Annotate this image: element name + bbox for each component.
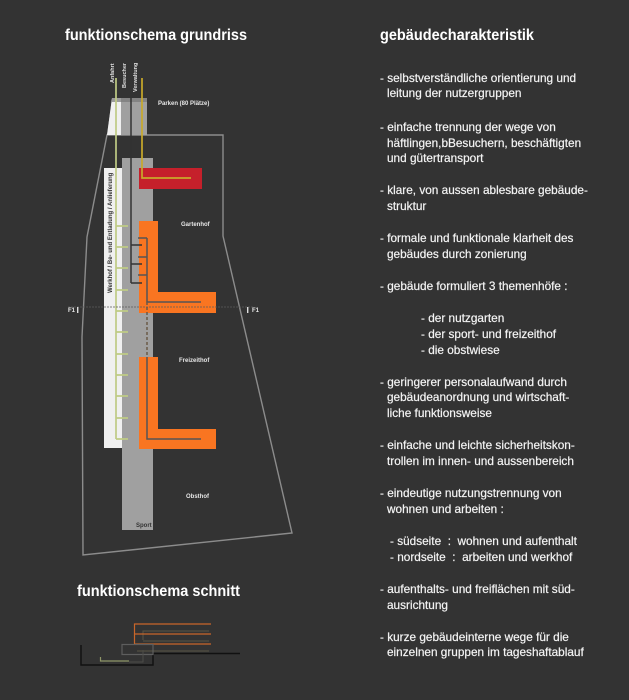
characteristics list: - aufenthalts- und freiflächen mit süd- bbox=[380, 582, 575, 596]
grey circulation spine bbox=[122, 158, 153, 530]
visitor route bbox=[131, 98, 201, 439]
faint connector bbox=[129, 650, 143, 662]
characteristics list: - selbstverständliche orientierung und bbox=[380, 71, 576, 85]
label: Freizeithof: Freizeithof bbox=[179, 358, 210, 364]
characteristics list: und gütertransport bbox=[387, 151, 484, 165]
grey basement box bbox=[122, 644, 153, 654]
section line F1: F1 bbox=[252, 308, 260, 314]
characteristics list: gebäudes durch zonierung bbox=[387, 247, 527, 261]
ground line bbox=[81, 645, 240, 665]
characteristics list: - klare, von aussen ablesbare gebäude- bbox=[380, 183, 588, 197]
characteristics list: - die obstwiese bbox=[421, 343, 500, 357]
route labels: Anfahrt bbox=[110, 63, 116, 83]
characteristics list: struktur bbox=[387, 199, 426, 213]
section line F1: F1 bbox=[68, 308, 76, 314]
orange building lower bbox=[139, 357, 216, 449]
upper faint levels bbox=[137, 631, 209, 651]
administration route bbox=[142, 78, 191, 178]
label: Obsthof: Obsthof bbox=[186, 494, 210, 500]
route labels bbox=[110, 62, 139, 92]
characteristics list: - einfache trennung der wege von bbox=[380, 120, 556, 134]
heading: funktionschema grundriss: funktionschema grundriss bbox=[65, 27, 247, 44]
characteristics list: - der sport- und freizeithof bbox=[421, 327, 557, 341]
characteristics list: leitung der nutzergruppen bbox=[387, 86, 521, 100]
label: Gartenhof: Gartenhof bbox=[181, 222, 211, 228]
characteristics list bbox=[380, 71, 588, 659]
parking block bbox=[107, 98, 147, 135]
characteristics list: liche funktionsweise bbox=[387, 406, 492, 420]
label: Sport: Sport bbox=[136, 523, 152, 529]
characteristics list: - kurze gebäudeinterne wege für die bbox=[380, 630, 569, 644]
characteristics list: - einfache und leichte sicherheitskon- bbox=[380, 438, 575, 452]
characteristics list: gebäudeanordnung und wirtschaft- bbox=[387, 390, 569, 404]
route labels: Verwaltung bbox=[133, 63, 139, 92]
white werkhof strip bbox=[104, 168, 122, 448]
route labels: Besucher bbox=[122, 62, 128, 88]
characteristics list: - eindeutige nutzungstrennung von bbox=[380, 486, 562, 500]
characteristics list: trollen im innen- und aussenbereich bbox=[387, 454, 574, 468]
characteristics list: wohnen und arbeiten : bbox=[386, 502, 504, 516]
label: Parken: Parken (80 Plätze) bbox=[158, 101, 209, 107]
characteristics list: häftlingen,bBesuchern, beschäftigten bbox=[387, 136, 581, 150]
characteristics list: - formale und funktionale klarheit des bbox=[380, 231, 574, 245]
orange levels bbox=[134, 624, 211, 644]
red administration block bbox=[139, 168, 202, 189]
label: Werkhof: Werkhof / Be- und Entladung / Anlieferung bbox=[108, 172, 114, 293]
floor plan diagram bbox=[68, 62, 292, 555]
heading: gebäudecharakteristik: gebäudecharakteristik bbox=[380, 27, 534, 44]
characteristics list: ausrichtung bbox=[387, 598, 448, 612]
characteristics list: - südseite : wohnen und aufenthalt bbox=[390, 534, 578, 548]
section line F1 bbox=[68, 307, 260, 314]
heading: funktionschema schnitt: funktionschema schnitt bbox=[77, 583, 241, 600]
delivery route bbox=[116, 78, 128, 439]
characteristics list: einzelnen gruppen im tageshaftablauf bbox=[387, 645, 584, 659]
section diagram bbox=[81, 624, 240, 665]
delivery level bbox=[100, 657, 129, 661]
site outline bbox=[82, 135, 292, 555]
characteristics list: - geringerer personalaufwand durch bbox=[380, 375, 567, 389]
characteristics list: - gebäude formuliert 3 themenhöfe : bbox=[380, 279, 568, 293]
characteristics list: - der nutzgarten bbox=[421, 311, 504, 325]
characteristics list: - nordseite : arbeiten und werkhof bbox=[390, 550, 573, 564]
orange building upper bbox=[139, 221, 216, 313]
